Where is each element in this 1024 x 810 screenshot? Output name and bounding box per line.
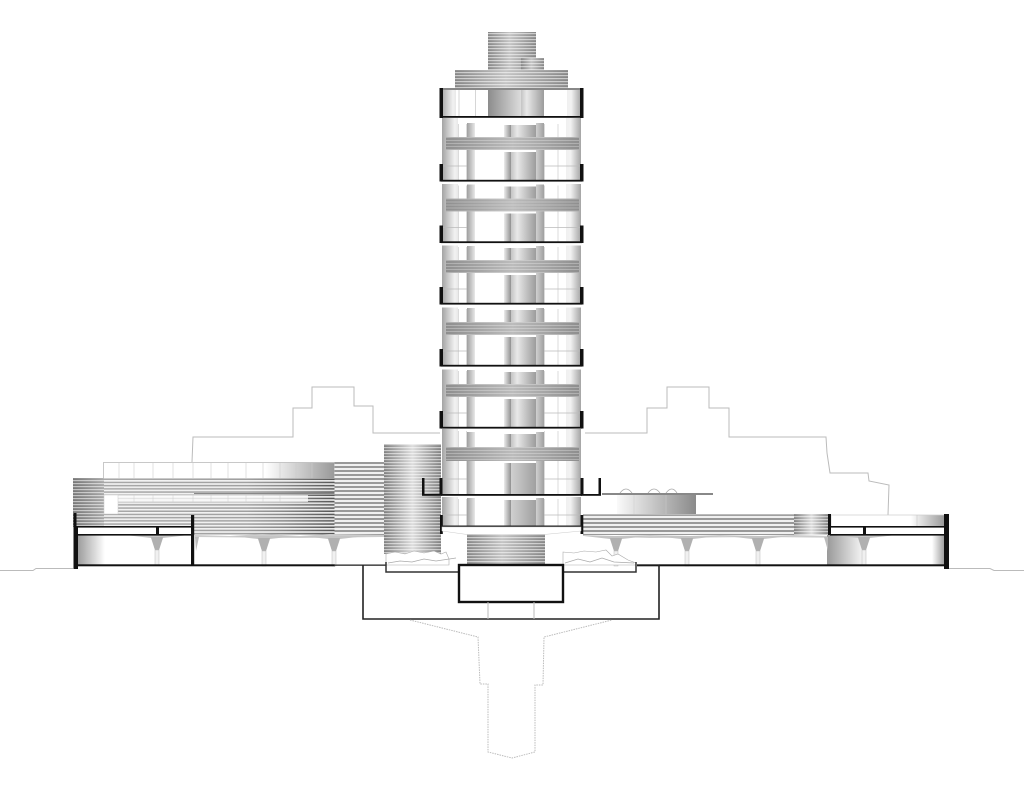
background building outline, left bbox=[192, 387, 440, 462]
lower floor white band bbox=[75, 527, 192, 534]
striped flat wall bbox=[334, 462, 384, 535]
interior gradient wall bbox=[77, 535, 105, 565]
striped end block bbox=[73, 478, 104, 527]
cantilevered balcony boxes bbox=[422, 478, 601, 496]
cafe drum on terrace bbox=[617, 495, 696, 514]
ragged ceiling line bbox=[583, 535, 897, 538]
wide stack bbox=[455, 70, 568, 88]
structural section lines bbox=[74, 513, 386, 569]
tower sixth floor with taller storey bbox=[441, 429, 582, 496]
outer foundation outline bbox=[363, 565, 659, 619]
upper stack bbox=[488, 32, 536, 70]
core lines bbox=[488, 602, 534, 619]
main striped curved wall bbox=[104, 478, 352, 535]
floor line stubs bbox=[335, 564, 659, 566]
planter foliage right bbox=[563, 550, 636, 565]
tower roof storey bbox=[440, 88, 584, 118]
upper glazed band bbox=[104, 462, 334, 478]
central tap-root box bbox=[459, 565, 563, 602]
striped cylinder beside tower bbox=[384, 444, 441, 554]
ragged ceiling line bbox=[195, 534, 384, 538]
right low-rise building bbox=[583, 489, 949, 569]
tower lowest storey bbox=[440, 497, 583, 534]
mushroom columns bbox=[125, 535, 366, 566]
left low-rise building bbox=[73, 462, 386, 569]
striped wing bbox=[583, 514, 794, 535]
tower side columns under roof bbox=[442, 118, 581, 124]
skylight domes bbox=[620, 489, 677, 493]
structural section lines bbox=[637, 514, 949, 569]
small stack bbox=[521, 58, 544, 70]
terrace slab bbox=[602, 493, 713, 495]
dotted taproot foundation bbox=[410, 620, 612, 758]
tower crown bbox=[455, 32, 568, 88]
mushroom columns bbox=[584, 535, 896, 566]
ground line bbox=[0, 568, 1024, 570]
gallery upper glazing bbox=[831, 515, 945, 527]
tower base shaft bbox=[467, 534, 545, 564]
planter foliage left bbox=[386, 551, 456, 565]
background building outline, right bbox=[585, 387, 889, 515]
planter pits bbox=[386, 562, 636, 572]
tower typical floors bbox=[440, 122, 584, 429]
small striped drum bbox=[794, 514, 829, 535]
basement section bbox=[335, 562, 659, 619]
interior gradient walls bbox=[827, 535, 945, 565]
